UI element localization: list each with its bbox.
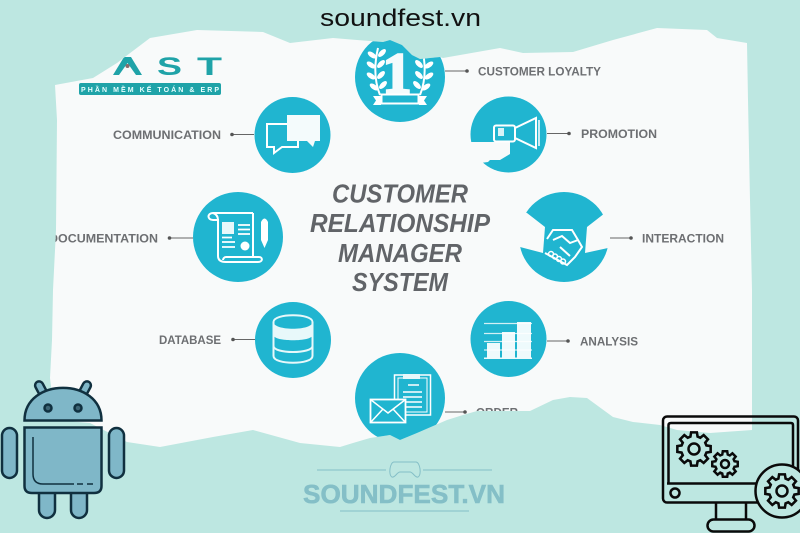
node: analysis: ANALYSIS bbox=[580, 336, 638, 348]
heading: customer relationship manager system: CUSTOMER bbox=[332, 178, 468, 208]
node: communication bbox=[113, 97, 330, 173]
node: customer loyalty: 1 bbox=[382, 41, 412, 106]
site title: soundfest.vn bbox=[320, 5, 481, 32]
logo: AST: T bbox=[197, 53, 222, 81]
node: analysis bbox=[470, 301, 638, 377]
node: communication: COMMUNICATION bbox=[113, 130, 221, 142]
node: documentation: DOCUMENTATION bbox=[49, 234, 158, 246]
node: documentation bbox=[49, 192, 283, 282]
watermark logo: soundfest.vn: SOUNDFEST.VN bbox=[303, 479, 505, 509]
node: order bbox=[355, 353, 519, 443]
logo: AST bbox=[79, 53, 222, 95]
node: promotion bbox=[465, 96, 657, 172]
watermark logo: soundfest.vn bbox=[303, 462, 505, 511]
icon: android robot bbox=[2, 380, 124, 518]
logo: AST: PHẦN MỀM KẾ TOÁN & ERP bbox=[81, 84, 219, 94]
node: interaction bbox=[512, 192, 724, 282]
node: promotion: PROMOTION bbox=[581, 129, 657, 141]
panel: torn paper CRM diagram bbox=[40, 20, 760, 450]
logo: AST: S bbox=[157, 53, 182, 81]
node: interaction: INTERACTION bbox=[642, 234, 724, 246]
node: customer loyalty bbox=[355, 32, 601, 122]
heading: customer relationship manager system bbox=[310, 178, 491, 297]
heading: customer relationship manager system: RELATIONSHIP bbox=[310, 208, 491, 238]
node: database bbox=[159, 302, 331, 378]
heading: customer relationship manager system: MANAGER bbox=[338, 238, 462, 268]
heading: customer relationship manager system: SYSTEM bbox=[352, 267, 449, 297]
icon: monitor with gears bbox=[663, 416, 800, 532]
node: order: ORDER bbox=[476, 408, 519, 420]
node: customer loyalty: CUSTOMER LOYALTY bbox=[478, 66, 601, 78]
node: database: DATABASE bbox=[159, 335, 221, 347]
